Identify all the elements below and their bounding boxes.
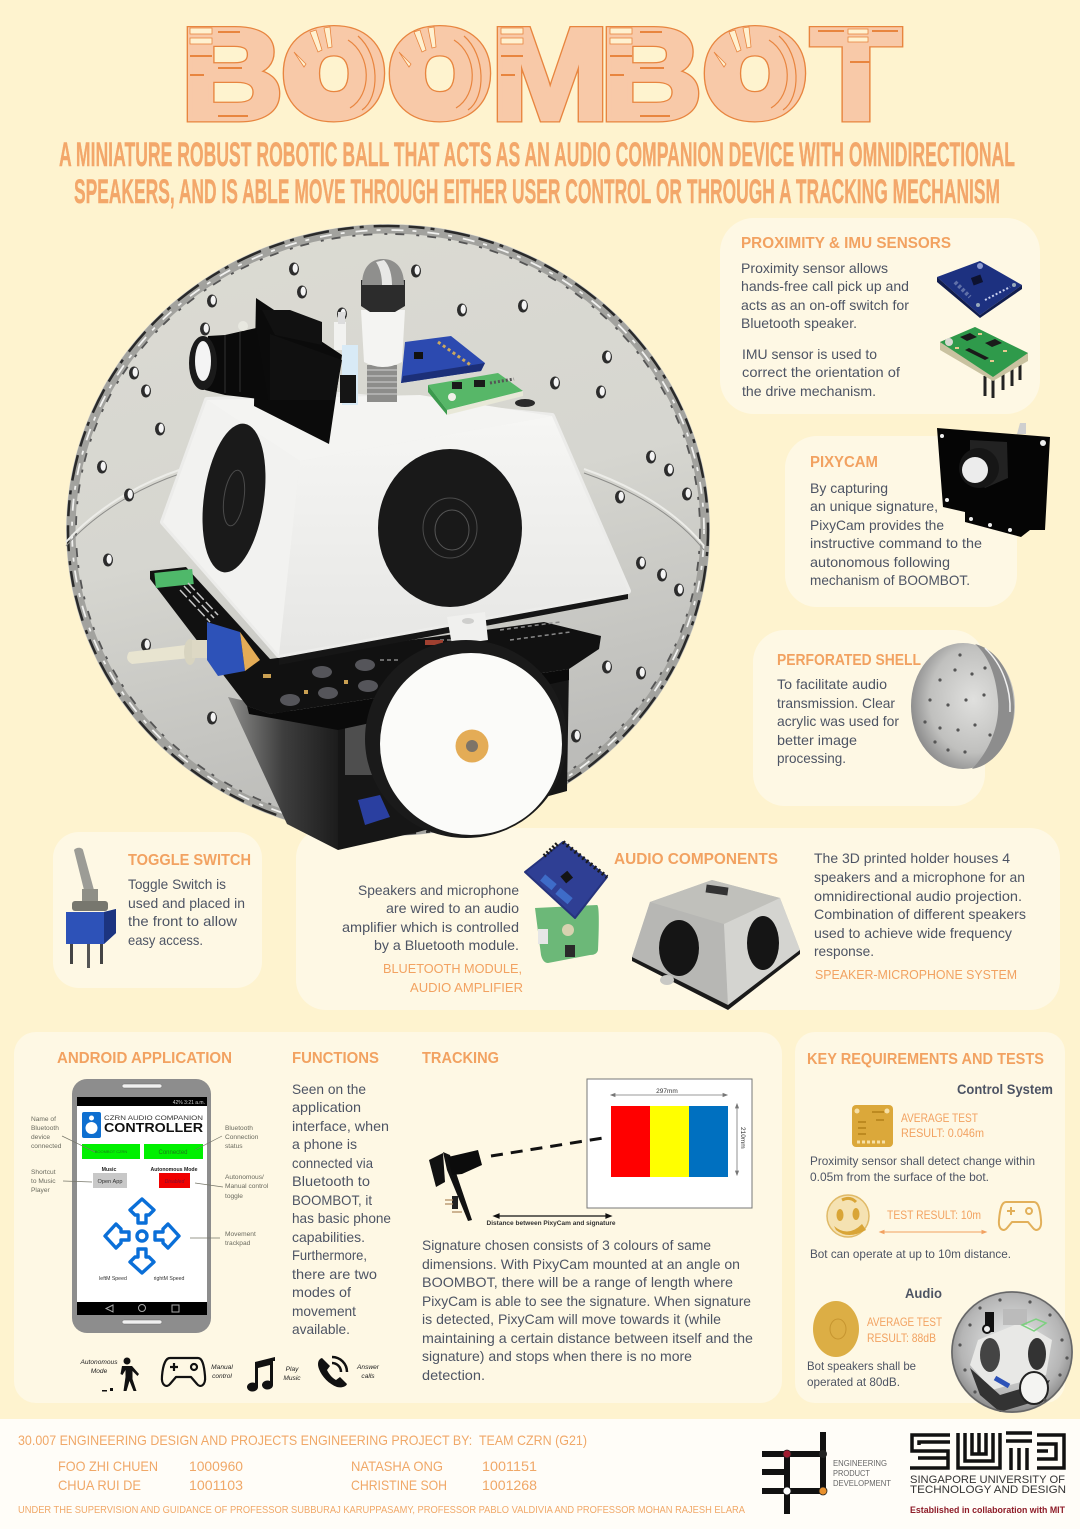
- text block: IMU sensor is used to: [742, 347, 877, 362]
- phone app screenshot: Disabled: [165, 1179, 184, 1185]
- text block: holder: response.: [814, 944, 874, 959]
- text block: holder: omnidirectional audio projection.: [814, 889, 1022, 904]
- icon: bluetooth module: [525, 842, 607, 918]
- result: proximity: RESULT: 0.046m: [901, 1126, 984, 1140]
- icon row: function icons: Music: [283, 1375, 301, 1382]
- text block: acrylic was used for: [777, 714, 899, 729]
- phone annotations: Player: [31, 1187, 50, 1194]
- panel: toggle switch: [53, 832, 262, 988]
- phone annotations: Autonomous/: [225, 1174, 264, 1181]
- text block: used and placed in: [128, 896, 245, 911]
- phone annotations: to Music: [31, 1178, 56, 1185]
- phone annotations: trackpad: [225, 1240, 251, 1247]
- panel: key requirements and tests: [795, 1032, 1073, 1413]
- text block: By capturing: [810, 481, 888, 496]
- shell: [66, 224, 710, 836]
- text block: [777, 677, 899, 766]
- subheading: audio: Audio: [905, 1286, 942, 1301]
- text block: [128, 877, 245, 948]
- result: audio: AVERAGE TEST: [867, 1315, 943, 1329]
- phone annotations: [31, 1116, 269, 1247]
- team members: CHRISTINE SOH: [351, 1478, 447, 1493]
- title: B: [600, 1, 702, 147]
- wheel axle cap: [447, 612, 488, 645]
- text block: functions: modes of: [292, 1285, 351, 1300]
- team members: CHUA RUI DE: [58, 1478, 141, 1493]
- team members: 1001103: [189, 1478, 243, 1493]
- icon: pixycam module: [937, 423, 1050, 537]
- phone app screenshot: CONTROLLER: [104, 1120, 204, 1135]
- circuit board: [150, 567, 601, 714]
- text block: hands-free call pick up and: [741, 279, 909, 294]
- text block: amplifier: amplifier which is controlled: [342, 920, 519, 935]
- phone app screenshot: BOOMBOT CZRN: [95, 1149, 127, 1154]
- title: O: [394, 13, 486, 136]
- footer band: [0, 1419, 1080, 1529]
- body: speaker holder: [163, 395, 628, 665]
- title: B: [600, 1, 702, 147]
- heading: TOGGLE SWITCH: [128, 852, 251, 869]
- text block: tracking: [422, 1238, 753, 1383]
- microphone: [515, 399, 535, 407]
- text block: PixyCam provides the: [810, 518, 944, 533]
- text block: functions: capabilities.: [292, 1230, 365, 1245]
- text block: functions: connected via: [292, 1156, 373, 1171]
- text block: audio requirement: operated at 80dB.: [807, 1375, 900, 1389]
- panel: pixycam: [785, 423, 1050, 607]
- heading: AUDIO COMPONENTS: [614, 851, 778, 868]
- text block: Toggle Switch is: [128, 877, 226, 892]
- icon: bot gold: [827, 1195, 869, 1237]
- text block: amplifier: are wired to an audio: [386, 901, 519, 916]
- icon row: function icons: Manual: [211, 1364, 233, 1371]
- text block: tracking: BOOMBOT, there will be a range of length where: [422, 1275, 733, 1290]
- text block: functions: Seen on the: [292, 1082, 366, 1097]
- text block: [810, 481, 982, 588]
- phone annotations: Bluetooth: [31, 1125, 59, 1132]
- title: O: [288, 13, 380, 136]
- text block: holder: speakers and a microphone for an: [814, 870, 1025, 885]
- text block: holder: [814, 851, 1026, 982]
- text block: Bluetooth speaker.: [741, 316, 857, 331]
- title: B: [181, 1, 283, 147]
- title: M: [491, 1, 609, 147]
- logo: engineering product development: ENGINEERING: [833, 1459, 887, 1468]
- heading: tracking: TRACKING: [422, 1050, 499, 1067]
- icon row: function icons: calls: [361, 1373, 375, 1380]
- team members: [58, 1459, 537, 1493]
- icon row: function icons: Answer: [356, 1364, 380, 1371]
- text block: correct the orientation of: [742, 365, 900, 380]
- team members: 1001268: [482, 1478, 537, 1493]
- text block: functions: movement: [292, 1304, 356, 1319]
- phone annotations: Name of: [31, 1116, 56, 1123]
- text block: holder: The 3D printed holder houses 4: [814, 851, 1010, 866]
- text block: functions: available.: [292, 1322, 350, 1337]
- signature tracking diagram: 210mm: [739, 1127, 746, 1149]
- icon row: function icons: [79, 1357, 380, 1392]
- heading: PROXIMITY & IMU SENSORS: [741, 235, 951, 252]
- text block: functions: there are two: [292, 1267, 377, 1282]
- text block: amplifier: AUDIO AMPLIFIER: [410, 980, 523, 995]
- course line: 30.007 ENGINEERING DESIGN AND PROJECTS ENGINEERING PROJECT BY: TEAM CZRN (G21): [18, 1433, 587, 1448]
- text block: functions: Bluetooth to: [292, 1174, 370, 1189]
- heading: functions: FUNCTIONS: [292, 1050, 379, 1067]
- logo: SUTD: SINGAPORE UNIVERSITY OF: [910, 1474, 1065, 1486]
- text block: an unique signature,: [810, 499, 938, 514]
- logo: SUTD: TECHNOLOGY AND DESIGN: [910, 1484, 1066, 1496]
- signature tracking diagram: [429, 1079, 752, 1227]
- green sensor board: [428, 373, 523, 415]
- logo: engineering product development: [762, 1432, 891, 1514]
- title: M: [491, 1, 609, 147]
- logo: SUTD: [910, 1433, 1066, 1515]
- icon: toggle switch: [66, 848, 116, 968]
- text block: functions: Furthermore,: [292, 1248, 367, 1263]
- text block: tracking: signature) and stops when there is no more: [422, 1349, 692, 1364]
- phone app screenshot: rightM Speed: [154, 1276, 185, 1282]
- phone app screenshot: 42% 3:21 a.m.: [173, 1100, 205, 1106]
- text block: amplifier: Speakers and microphone: [358, 883, 519, 898]
- phone annotations: Bluetooth: [225, 1125, 253, 1132]
- phone annotations: Connection: [225, 1134, 259, 1141]
- chassis: [228, 669, 569, 850]
- result: proximity: AVERAGE TEST: [901, 1111, 979, 1125]
- text block: amplifier: BLUETOOTH MODULE,: [383, 961, 522, 976]
- panel: audio components: [296, 828, 1060, 1010]
- title: B: [181, 1, 283, 147]
- text block: processing.: [777, 751, 846, 766]
- supervision line: UNDER THE SUPERVISION AND GUIDANCE OF PROFESSOR SUBBURAJ KARUPPASAMY, PROFESSOR PABLO VALDIVIA AND PROFESSOR MOHAN RAJESH ELARA: [18, 1504, 745, 1516]
- result: proximity: [901, 1111, 984, 1140]
- text block: audio requirement: [807, 1359, 916, 1389]
- title: O: [709, 13, 801, 136]
- icon: pixycam side view: [429, 1150, 482, 1221]
- text block: functions: interface, when: [292, 1119, 389, 1134]
- title: T: [811, 1, 901, 147]
- text block: [741, 261, 909, 399]
- panel: proximity and IMU sensors: [720, 218, 1040, 414]
- text block: proximity requirement: [810, 1154, 1035, 1184]
- icon: speaker holder: [632, 880, 800, 1010]
- signature tracking diagram: Distance between PixyCam and signature: [486, 1220, 616, 1227]
- subheading: control system: Control System: [957, 1082, 1053, 1097]
- icon: IMU sensor board: [940, 327, 1028, 398]
- camera: [189, 298, 358, 444]
- panel: android application, functions and tracking: [14, 1032, 782, 1403]
- text block: functions: a phone is: [292, 1137, 357, 1152]
- title: T: [811, 1, 901, 147]
- phone app screenshot: [72, 1079, 211, 1333]
- text block: the drive mechanism.: [742, 384, 876, 399]
- text block: transmission. Clear: [777, 696, 895, 711]
- phone annotations: device: [31, 1134, 50, 1141]
- result: range: TEST RESULT: 10m: [887, 1208, 981, 1222]
- icon: gamepad gold: [999, 1202, 1041, 1230]
- text block: tracking: detection.: [422, 1368, 485, 1383]
- text block: better image: [777, 733, 857, 748]
- icon: proximity sensor gold: [852, 1105, 893, 1147]
- result: audio: [867, 1315, 943, 1345]
- text block: acts as an on-off switch for: [741, 298, 909, 313]
- text block: tracking: dimensions. With PixyCam mounted at an angle on: [422, 1257, 740, 1272]
- text block: tracking: PixyCam is able to see the signature. When signature: [422, 1294, 751, 1309]
- title: O: [394, 13, 486, 136]
- speaker: left: [194, 420, 274, 576]
- phone app screenshot: Music: [102, 1167, 116, 1173]
- phone app screenshot: leftM Speed: [99, 1276, 127, 1282]
- phone annotations: Movement: [225, 1231, 256, 1238]
- logo: engineering product development: PRODUCT: [833, 1469, 870, 1478]
- text block: mechanism of BOOMBOT.: [810, 573, 970, 588]
- text block: functions: application: [292, 1100, 361, 1115]
- text block: functions: [292, 1082, 391, 1337]
- text block: amplifier: by a Bluetooth module.: [374, 938, 519, 953]
- toggle switch on bot: [127, 622, 260, 676]
- blue sensor board: [401, 336, 485, 383]
- text block: tracking: maintaining a certain distance between itself and the: [422, 1331, 753, 1346]
- tagline: [59, 136, 1015, 211]
- title: O: [709, 13, 801, 136]
- text block: audio requirement: Bot speakers shall be: [807, 1359, 916, 1373]
- team members: 1001151: [482, 1459, 537, 1474]
- icon: perforated hemisphere: [911, 643, 1015, 769]
- text block: range requirement: Bot can operate at up to 10m distance.: [810, 1247, 1011, 1261]
- heading: KEY REQUIREMENTS AND TESTS: [807, 1051, 1044, 1068]
- text block: easy access.: [128, 933, 203, 948]
- phone annotations: Manual control: [225, 1183, 269, 1190]
- team members: NATASHA ONG: [351, 1459, 443, 1474]
- heading: android: ANDROID APPLICATION: [57, 1050, 232, 1067]
- phone annotations: toggle: [225, 1193, 243, 1200]
- text block: proximity requirement: 0.05m from the surface of the bot.: [810, 1170, 989, 1184]
- team members: 1000960: [189, 1459, 243, 1474]
- phone app screenshot: Autonomous Mode: [151, 1167, 198, 1173]
- text block: functions: has basic phone: [292, 1211, 391, 1226]
- logo: SUTD: Established in collaboration with MIT: [910, 1505, 1065, 1515]
- phone app screenshot: CZRN AUDIO COMPANION: [104, 1115, 203, 1122]
- sensor post: [361, 259, 405, 402]
- text block: amplifier: [342, 883, 523, 995]
- icon: speaker gold: [813, 1301, 859, 1357]
- icon row: function icons: Autonomous: [79, 1359, 118, 1366]
- title: [181, 1, 901, 147]
- icon: proximity sensor board: [937, 261, 1022, 318]
- phone app screenshot: Connected: [158, 1150, 188, 1156]
- text block: Proximity sensor allows: [741, 261, 888, 276]
- phone annotations: connected: [31, 1143, 62, 1150]
- panel: perforated shell: [753, 630, 1015, 806]
- phone app screenshot: Open App: [98, 1179, 122, 1185]
- heading: PIXYCAM: [810, 454, 878, 471]
- text block: holder: used to achieve wide frequency: [814, 926, 1012, 941]
- logo: engineering product development: DEVELOPMENT: [833, 1479, 891, 1488]
- result: audio: RESULT: 88dB: [867, 1331, 936, 1345]
- phone annotations: status: [225, 1143, 243, 1150]
- text block: holder: Combination of different speakers: [814, 907, 1026, 922]
- text block: autonomous following: [810, 555, 950, 570]
- signature tracking diagram: 297mm: [656, 1088, 678, 1095]
- small white standoff: [334, 312, 346, 350]
- text block: instructive command to the: [810, 536, 982, 551]
- main illustration: robot in perforated ball: [66, 224, 710, 850]
- phone annotations: Shortcut: [31, 1169, 56, 1176]
- text block: holder: SPEAKER-MICROPHONE SYSTEM: [815, 967, 1017, 982]
- text block: tracking: is detected, PixyCam will move towards it (while: [422, 1312, 721, 1327]
- text block: proximity requirement: Proximity sensor shall detect change within: [810, 1154, 1035, 1168]
- icon: mini robot ball: [951, 1291, 1073, 1413]
- icon row: function icons: control: [212, 1373, 232, 1380]
- heading: PERFORATED SHELL: [777, 652, 921, 669]
- text block: the front to allow: [128, 914, 237, 929]
- title: O: [288, 13, 380, 136]
- text block: To facilitate audio: [777, 677, 887, 692]
- icon: amplifier board: [535, 905, 599, 963]
- speaker: right: [378, 449, 522, 607]
- icon row: function icons: Play: [286, 1366, 299, 1373]
- text block: functions: BOOMBOT, it: [292, 1193, 372, 1208]
- wheel: [365, 640, 567, 838]
- icon row: function icons: Mode: [91, 1368, 108, 1375]
- team members: FOO ZHI CHUEN: [58, 1459, 158, 1474]
- text block: tracking: Signature chosen consists of 3 colours of same: [422, 1238, 711, 1253]
- arrow: range: [880, 1230, 986, 1234]
